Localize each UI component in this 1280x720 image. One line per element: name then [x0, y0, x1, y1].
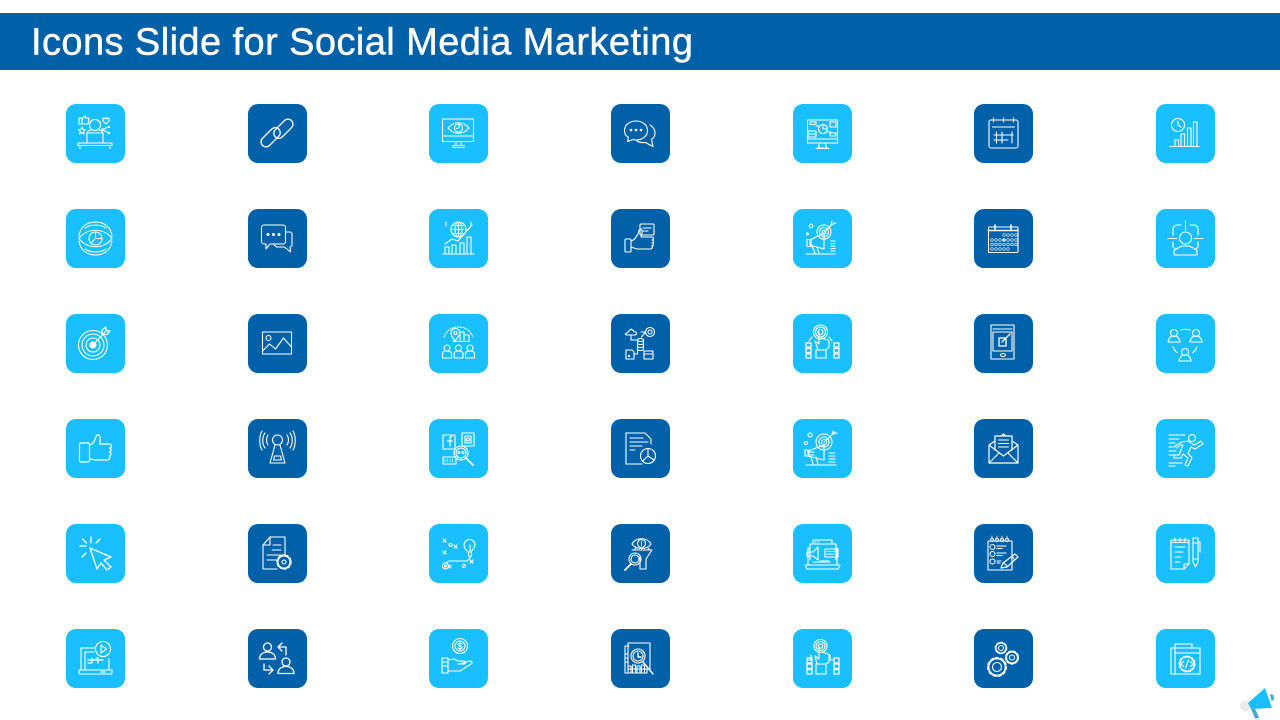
icon: report with magnifier — [611, 629, 670, 688]
icon: cursor click — [66, 524, 125, 583]
icon: picture frame — [248, 314, 307, 373]
icon: eye with pie chart — [66, 209, 125, 268]
icon: three connected people — [1156, 314, 1215, 373]
icon: phone with edit screen — [974, 314, 1033, 373]
icon: chain link — [248, 104, 307, 163]
icon: globe over growth bars — [429, 209, 488, 268]
icon: hand clicking with blocks variant — [793, 629, 852, 688]
icon: web page with code gear — [1156, 629, 1215, 688]
icon: broadcast tower — [248, 419, 307, 478]
icon: monitor with eye — [429, 104, 488, 163]
icon: document with pie chart — [611, 419, 670, 478]
icon: open envelope — [974, 419, 1033, 478]
title: Icons Slide for Social Media Marketing — [31, 22, 693, 64]
icon: social search — [429, 419, 488, 478]
icon: team with location and building — [429, 314, 488, 373]
icon: thumbs up with message bubble — [611, 209, 670, 268]
icon: megaphone and target — [793, 209, 852, 268]
icon: hand clicking with blocks — [793, 314, 852, 373]
icon: checklist with pencil — [974, 524, 1033, 583]
icon: funnel with eye and magnifier — [611, 524, 670, 583]
icon: three gears — [974, 629, 1033, 688]
icon: strategy with light bulb — [429, 524, 488, 583]
icon: laptop with megaphone — [793, 524, 852, 583]
icon: megaphone and target variant — [793, 419, 852, 478]
icon: running person — [1156, 419, 1215, 478]
icon: target with arrow — [66, 314, 125, 373]
icon: notepad and pen — [1156, 524, 1215, 583]
icon: thumbs up — [66, 419, 125, 478]
icon: corner megaphone — [1240, 688, 1274, 719]
icon: calendar with hash — [974, 104, 1033, 163]
icon: speech bubbles with dots — [611, 104, 670, 163]
icon: data flow with database — [611, 314, 670, 373]
icon: dashboard monitor — [793, 104, 852, 163]
icon: hand holding coin — [429, 629, 488, 688]
icon: laptop with video — [66, 629, 125, 688]
icon: document with gear — [248, 524, 307, 583]
icon: calendar grid with rings — [974, 209, 1033, 268]
title banner — [0, 13, 1280, 70]
icon: person in target crosshair — [1156, 209, 1215, 268]
icon: clock and bar chart — [1156, 104, 1215, 163]
icon: person at laptop with social reactions — [66, 104, 125, 163]
icon: rectangular chat bubbles — [248, 209, 307, 268]
icon: swapping people — [248, 629, 307, 688]
